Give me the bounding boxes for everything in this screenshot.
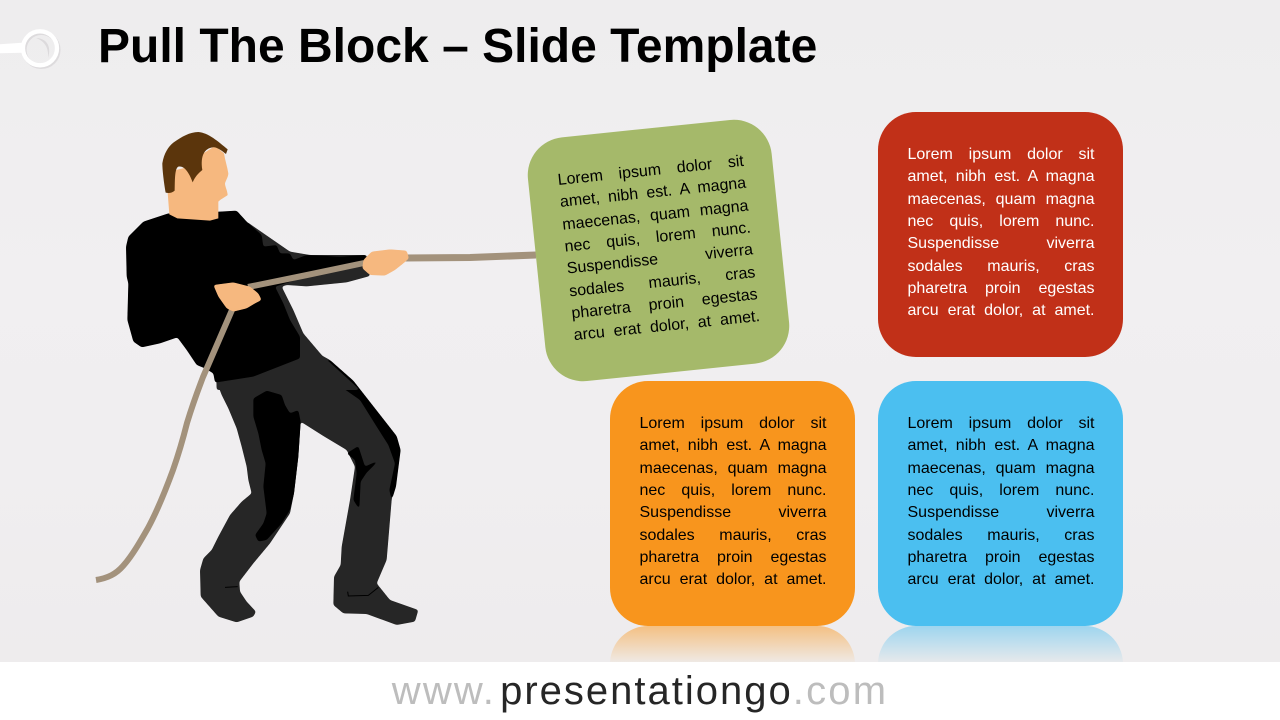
orange block text: Lorem ipsum dolor sit <box>640 415 826 432</box>
green block text: sodales mauris, cras <box>568 264 756 300</box>
rope <box>96 255 536 580</box>
orange block text: Suspendisse viverra <box>640 504 826 521</box>
red block text: amet, nibh est. A magna <box>908 168 1094 185</box>
green block text: arcu erat dolor, at amet. <box>573 308 761 345</box>
blue block text: amet, nibh est. A magna <box>908 437 1094 454</box>
blue block text: sodales mauris, cras <box>908 527 1094 544</box>
blue block text: arcu erat dolor, at amet. <box>908 571 1094 588</box>
trousers and shoes <box>200 343 418 625</box>
logo: ring and rope end <box>0 29 60 69</box>
orange block text: sodales mauris, cras <box>640 527 826 544</box>
red block text: pharetra proin egestas <box>908 280 1094 297</box>
panel: blue block <box>878 381 1123 626</box>
green block text: amet, nibh est. A magna <box>559 175 747 211</box>
blue block text: pharetra proin egestas <box>908 549 1094 566</box>
blue block text: nec quis, lorem nunc. <box>908 482 1094 499</box>
footer band with website address <box>0 662 1280 720</box>
red block text: arcu erat dolor, at amet. <box>908 302 1094 319</box>
blue block text <box>908 415 1095 588</box>
green block text: pharetra proin egestas <box>571 286 758 322</box>
green block text <box>557 153 761 345</box>
orange block text: amet, nibh est. A magna <box>640 437 826 454</box>
torso and arms <box>126 211 370 390</box>
red block text: Lorem ipsum dolor sit <box>908 146 1094 163</box>
orange block text: maecenas, quam magna <box>640 460 826 477</box>
green block text: Lorem ipsum dolor sit <box>557 153 745 189</box>
green block text: maecenas, quam magna <box>561 197 749 233</box>
footer band with website address: www.presentationgo.com <box>392 669 888 713</box>
panel: orange block <box>610 381 855 626</box>
hands <box>213 249 409 312</box>
green block text: Suspendisse viverra <box>566 242 754 278</box>
head and hair <box>162 132 228 221</box>
orange block text: nec quis, lorem nunc. <box>640 482 826 499</box>
red block text: nec quis, lorem nunc. <box>908 213 1094 230</box>
block reflections <box>610 626 1122 662</box>
green block text: nec quis, lorem nunc. <box>564 219 752 256</box>
red block text: Suspendisse viverra <box>908 235 1094 252</box>
blue block text: Suspendisse viverra <box>908 504 1094 521</box>
blue block text: Lorem ipsum dolor sit <box>908 415 1094 432</box>
panel: green tilted block <box>524 116 793 385</box>
blue block text: maecenas, quam magna <box>908 460 1094 477</box>
panel: red block <box>878 112 1123 357</box>
illustration: man pulling a rope <box>96 132 536 625</box>
title: Pull The Block – Slide Template <box>98 20 817 73</box>
red block text <box>908 146 1095 319</box>
orange block text: pharetra proin egestas <box>640 549 826 566</box>
red block text: sodales mauris, cras <box>908 258 1094 275</box>
red block text: maecenas, quam magna <box>908 191 1094 208</box>
orange block text: arcu erat dolor, at amet. <box>640 571 826 588</box>
orange block text <box>640 415 827 588</box>
